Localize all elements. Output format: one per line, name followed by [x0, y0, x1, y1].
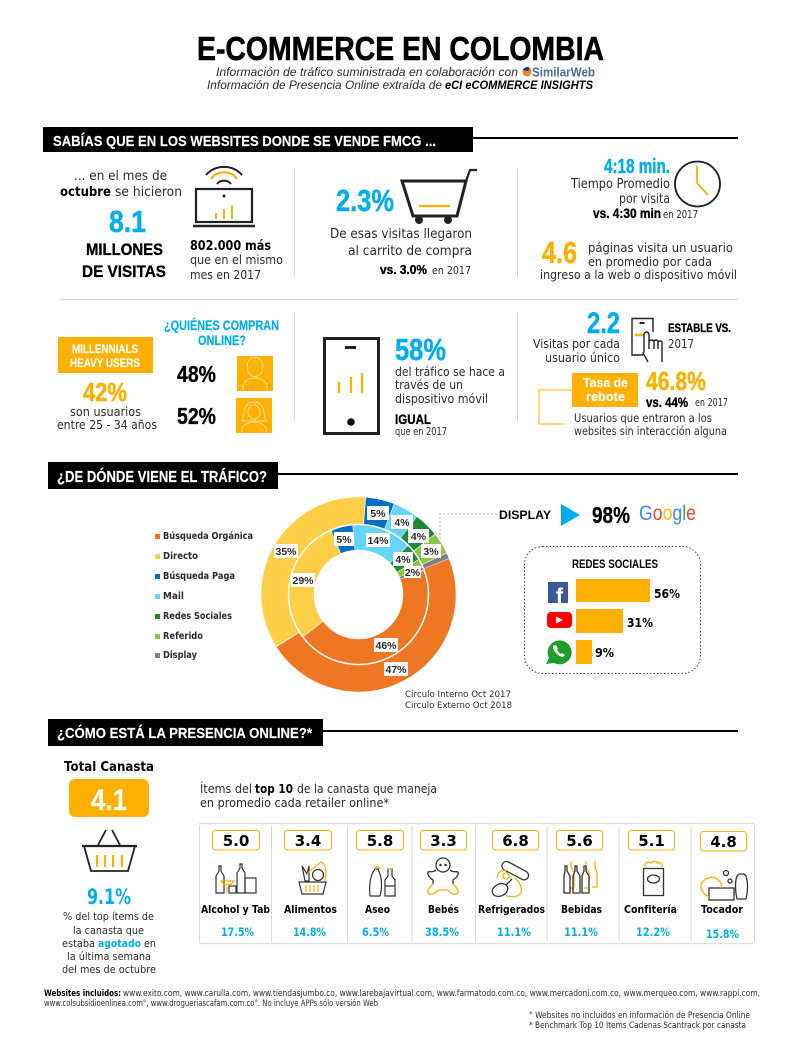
- item: tocador: 4.8: [710, 833, 737, 851]
- panel: tasa de rebote: [539, 366, 728, 438]
- panel: tráfico móvil: que en 2017: [395, 426, 447, 438]
- icon: youtube: [547, 612, 572, 628]
- panel: visitas por usuario: Visitas por cada: [533, 336, 620, 351]
- panel: carrito: en 2017: [432, 265, 471, 277]
- item: aseo: 5.8: [367, 832, 393, 850]
- text: 802.000 más: que en el mismo: [190, 252, 283, 267]
- item: confitería: 12.2%: [636, 925, 670, 939]
- badge: 4.1: 4.1: [91, 784, 127, 817]
- table: categorías: [199, 824, 754, 944]
- title block: [197, 30, 604, 92]
- donut data labels: 4%: [395, 554, 411, 566]
- subtitle line 2: [207, 78, 593, 92]
- icon: clock: [675, 162, 720, 206]
- donut data labels: 2%: [405, 567, 421, 579]
- text: top 10 intro: Ítems del: [200, 781, 252, 796]
- text: 802.000 más: 802.000 más: [190, 239, 271, 254]
- text: top 10 intro: en promedio cada retailer online*: [200, 795, 389, 810]
- subtitle line 2: eCI eCOMMERCE INSIGHTS: [445, 78, 593, 92]
- donut data labels: 29%: [292, 575, 314, 587]
- panel: display google: 98%: [592, 502, 630, 528]
- text: agotado: la canasta que: [73, 924, 144, 937]
- text: 802.000 más: mes en 2017: [190, 267, 261, 282]
- donut data labels: 14%: [367, 535, 389, 547]
- panel: páginas por visita: [540, 235, 737, 282]
- legend: fuentes de tráfico: Redes Sociales: [163, 611, 232, 622]
- icon: laptop with wifi: [193, 167, 255, 226]
- badge: tasa de rebote: Tasa de: [583, 375, 628, 390]
- title: E-COMMERCE EN COLOMBIA: [197, 30, 604, 67]
- bar: whatsapp: 9%: [595, 645, 614, 660]
- footnotes: [529, 1010, 750, 1031]
- panel: visitas: ... en el mes de: [74, 169, 167, 184]
- panel: tiempo promedio: [570, 156, 720, 221]
- panel: total canasta: [62, 760, 156, 976]
- stat: 9.1%: 9.1%: [87, 885, 131, 909]
- donut data labels: 35%: [275, 546, 297, 558]
- panel: redes sociales: [524, 546, 700, 674]
- footer: websites incluidos: Websites incluidos:: [44, 989, 121, 999]
- item: alcohol y tabaco: 17.5%: [221, 925, 254, 939]
- panel: tráfico móvil: dispositivo móvil: [395, 391, 488, 406]
- panel: páginas por visita: páginas visita un usuario: [588, 240, 733, 255]
- item: alimentos: 14.8%: [293, 925, 326, 939]
- icon: man: [237, 356, 273, 391]
- item: tocador: [700, 832, 748, 941]
- legend: fuentes de tráfico: Búsqueda Orgánica: [163, 531, 253, 542]
- donut data labels: [274, 506, 441, 676]
- icon: hand on phone: [632, 318, 662, 362]
- section heading: sabías que: SABÍAS QUE EN LOS WEBSITES DONDE SE VENDE FMCG ...: [53, 133, 436, 150]
- icon: facebook: [548, 582, 568, 608]
- item: tocador: Tocador: [701, 903, 743, 916]
- panel: tasa de rebote: vs. 44%: [646, 394, 688, 410]
- section heading: tráfico: ¿DE DÓNDE VIENE EL TRÁFICO?: [57, 467, 267, 486]
- legend: fuentes de tráfico: Directo: [163, 551, 198, 562]
- panel: tráfico móvil: través de un: [395, 377, 463, 392]
- panel: millennials: [57, 337, 157, 432]
- panel: tasa de rebote: Usuarios que entraron a los: [574, 411, 712, 425]
- caption: círculos: [405, 690, 512, 711]
- legend: fuentes de tráfico: Display: [163, 650, 198, 661]
- item: tocador: 15.8%: [706, 927, 739, 941]
- panel: total canasta: Total Canasta: [64, 760, 154, 775]
- item: alcohol y tabaco: 5.0: [223, 832, 249, 850]
- stat: 8.1 millones: 8.1: [109, 204, 146, 239]
- section heading: presencia online: ¿CÓMO ESTÁ LA PRESENCIA ONLINE?*: [57, 724, 312, 742]
- panel: display google: [499, 502, 696, 528]
- donut data labels: 4%: [411, 531, 427, 543]
- panel: carrito: [330, 170, 477, 277]
- badge: millennials heavy users: [58, 337, 153, 373]
- panel: display google: DISPLAY: [499, 508, 551, 522]
- panel: quiénes compran: ONLINE?: [198, 332, 246, 348]
- panel: visitas por usuario: ESTABLE VS.: [668, 321, 731, 335]
- donut data labels: 4%: [394, 517, 410, 529]
- logo: Google: Google: [639, 502, 696, 525]
- panel: carrito: De esas visitas llegaron: [330, 227, 472, 242]
- item: bebidas: 11.1%: [564, 925, 598, 939]
- item: refrigerados: 11.1%: [497, 925, 531, 939]
- item: alcohol y tabaco: [201, 830, 270, 939]
- text: agotado: [62, 910, 156, 976]
- badge: millennials heavy users: HEAVY USERS: [70, 356, 140, 370]
- caption: círculos: Circulo Externo Oct 2018: [405, 701, 512, 711]
- panel: millennials: son usuarios: [70, 404, 141, 419]
- legend: fuentes de tráfico: Mail: [163, 591, 184, 602]
- bar: facebook: 56%: [654, 586, 680, 601]
- item: bebidas: Bebidas: [561, 903, 602, 916]
- bar: facebook: [576, 579, 680, 602]
- item: aseo: 6.5%: [362, 925, 389, 939]
- item: refrigerados: 6.8: [502, 832, 529, 850]
- item: bebidas: 5.6: [566, 832, 593, 850]
- footnotes: ° Websites no incluidos en información de Presencia Online: [529, 1010, 750, 1021]
- item: bebés: Bebés: [428, 903, 459, 916]
- panel: páginas por visita: 4.6: [542, 235, 577, 270]
- donut data labels: 5%: [370, 508, 386, 520]
- caption: círculos: Circulo Interno Oct 2017: [405, 690, 511, 700]
- badge: tasa de rebote: [572, 373, 638, 407]
- donut data labels: 47%: [385, 664, 407, 676]
- subtitle line 1: Información de tráfico suministrada en colaboración con: [216, 65, 518, 79]
- item: bebés: [420, 830, 466, 939]
- panel: quiénes compran: ¿QUIÉNES COMPRAN: [164, 317, 279, 333]
- panel: visitas: MILLONES: [86, 240, 163, 259]
- panel: tasa de rebote: 46.8%: [646, 366, 706, 396]
- stat: 42%: 42%: [83, 377, 127, 407]
- panel: visitas por usuario: [533, 307, 731, 365]
- item: alcohol y tabaco: Alcohol y Tab: [201, 903, 270, 916]
- icon: basket: [82, 830, 137, 871]
- text: top 10 intro: top 10: [255, 781, 293, 796]
- donut data labels: 5%: [336, 534, 352, 546]
- panel: tiempo promedio: vs. 4:30 min: [593, 206, 661, 221]
- panel: tráfico móvil: IGUAL: [395, 411, 431, 427]
- stat: 58%: 58%: [395, 332, 446, 367]
- icon: smartphone: [324, 338, 378, 434]
- footer: websites incluidos: [44, 989, 760, 1009]
- badge: tasa de rebote: rebote: [586, 389, 625, 404]
- panel: redes sociales: REDES SOCIALES: [572, 559, 658, 571]
- panel: tiempo promedio: en 2017: [663, 209, 698, 221]
- section heading: tráfico: [48, 462, 738, 489]
- item: refrigerados: [478, 830, 545, 939]
- legend: fuentes de tráfico: [155, 531, 253, 661]
- panel: quiénes compran: 48%: [177, 361, 216, 387]
- icon: shopping cart: [402, 170, 477, 224]
- legend: fuentes de tráfico: Referido: [163, 631, 203, 642]
- panel: tiempo promedio: 4:18 min.: [604, 156, 670, 178]
- item: alimentos: [284, 830, 337, 939]
- donut data labels: 46%: [375, 640, 397, 652]
- bar: youtube: 31%: [627, 615, 653, 630]
- item: refrigerados: Refrigerados: [478, 903, 545, 916]
- section heading: sabías que: [43, 127, 738, 152]
- text: agotado: en: [144, 937, 156, 950]
- text: agotado: % del top ítems de: [63, 910, 154, 923]
- panel: carrito: al carrito de compra: [348, 244, 472, 259]
- item: alimentos: 3.4: [295, 832, 321, 850]
- panel: tasa de rebote: en 2017: [695, 397, 728, 409]
- item: confitería: [624, 830, 677, 939]
- connector: display: [440, 514, 498, 543]
- panel: visitas por usuario: 2017: [668, 337, 694, 351]
- panel: visitas por usuario: 2.2: [587, 307, 620, 340]
- chart: donut de tráfico: [241, 477, 476, 712]
- text: 802.000 más: [190, 239, 283, 282]
- text: top 10 intro: [200, 781, 437, 810]
- footer: websites incluidos: www.colsubsidioenlinea.com°, www.drogueriascafam.com.co°. No incluye APPs sólo versión Web: [44, 998, 378, 1009]
- item: aseo: Aseo: [365, 903, 390, 916]
- bar: whatsapp: [576, 640, 614, 664]
- panel: visitas: DE VISITAS: [82, 262, 166, 281]
- SimilarWeb logo: SimilarWeb: [532, 66, 595, 80]
- legend: fuentes de tráfico: Búsqueda Paga: [163, 571, 235, 582]
- panel: quiénes compran: [164, 317, 279, 433]
- text: agotado: la última semana: [67, 950, 151, 963]
- item: bebidas: [556, 830, 602, 939]
- badge: 4.1: [69, 779, 149, 817]
- panel: visitas: [60, 167, 283, 282]
- panel: tiempo promedio: Tiempo Promedio: [570, 177, 670, 192]
- item: confitería: Confitería: [624, 903, 677, 916]
- icon: whatsapp: [546, 640, 572, 664]
- panel: páginas por visita: en promedio por cada: [588, 254, 712, 269]
- subtitle line 2: Información de Presencia Online extraída de: [207, 78, 442, 92]
- icon: woman: [236, 398, 272, 433]
- text: agotado: agotado: [98, 937, 141, 950]
- panel: tráfico móvil: [324, 332, 505, 438]
- item: alimentos: Alimentos: [284, 903, 337, 916]
- item: aseo: [356, 830, 404, 939]
- bar: youtube: [576, 609, 653, 633]
- footnotes: * Benchmark Top 10 Items Cadenas Scantrack por canasta: [529, 1021, 746, 1031]
- text: top 10 intro: de la canasta que maneja: [297, 781, 437, 796]
- item: bebés: 3.3: [430, 832, 457, 850]
- section heading: presencia online: [48, 719, 738, 746]
- panel: millennials: entre 25 - 34 años: [57, 417, 157, 432]
- panel: tráfico móvil: del tráfico se hace a: [395, 364, 505, 379]
- donut data labels: 3%: [423, 546, 439, 558]
- text: agotado: estaba: [62, 937, 95, 950]
- icon: arrow: [561, 504, 580, 526]
- stat: 2.3%: 2.3%: [336, 183, 394, 218]
- item: confitería: 5.1: [638, 832, 665, 850]
- panel: visitas por usuario: usuario único: [545, 350, 620, 365]
- panel: quiénes compran: 52%: [177, 403, 216, 429]
- icon: facebook: f: [556, 585, 564, 608]
- panel: tiempo promedio: por visita: [619, 192, 670, 207]
- badge: millennials heavy users: MILLENNIALS: [72, 342, 138, 356]
- panel: visitas: se hicieron: [115, 185, 182, 200]
- panel: tasa de rebote: websites sin interacción alguna: [574, 424, 727, 438]
- panel: visitas: octubre: [60, 185, 111, 200]
- item: bebés: 38.5%: [425, 925, 459, 939]
- panel: carrito: vs. 3.0%: [380, 263, 427, 277]
- text: agotado: del mes de octubre: [62, 963, 156, 976]
- panel: páginas por visita: ingreso a la web o dispositivo móvil: [540, 267, 737, 282]
